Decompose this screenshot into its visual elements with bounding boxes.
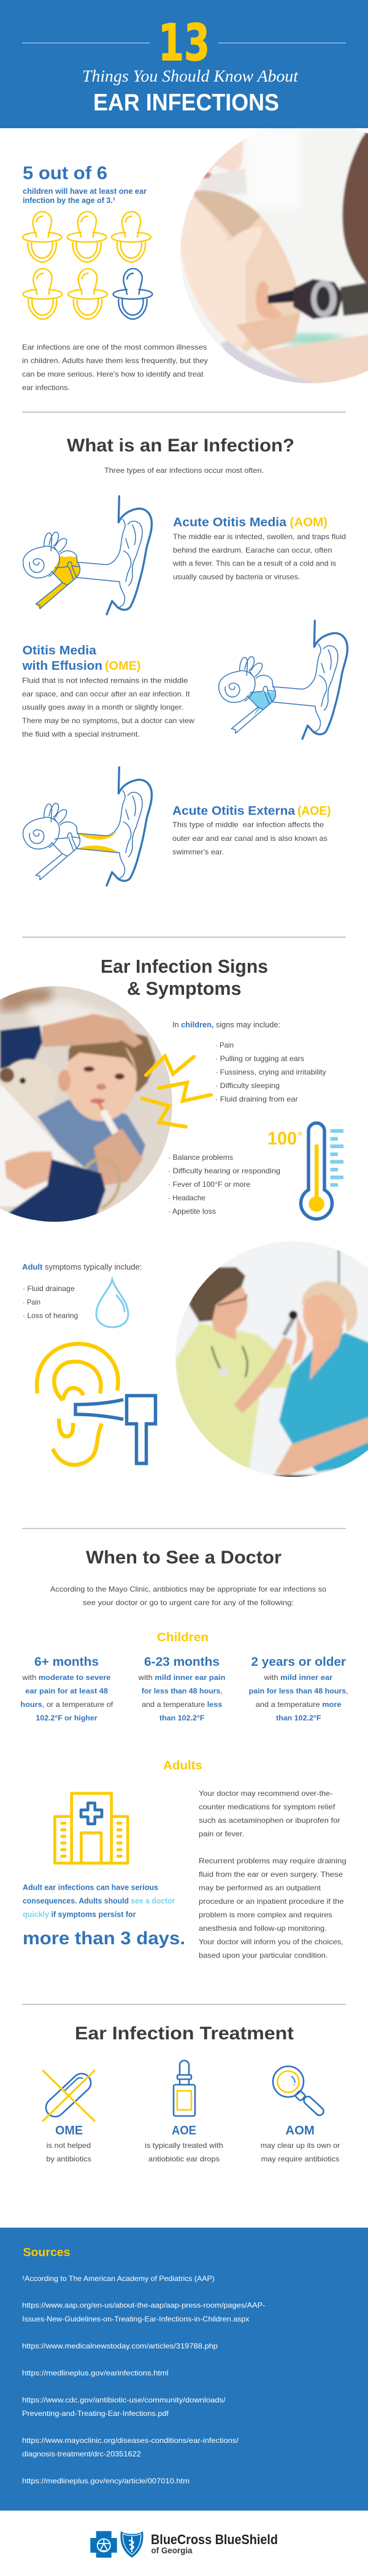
treatment: AOE: AOE (172, 2124, 196, 2137)
column: 2 years or older: pain for less than 48 hours , (249, 1687, 348, 1695)
source list: https://medlineplus.gov/ency/article/007010.htm (22, 2477, 190, 2485)
text block: AOM: usually caused by bacteria or viruses. (173, 573, 301, 581)
callout: adult warning: quickly if symptoms persist for (23, 1910, 136, 1919)
logo: BlueCross BlueShield of Georgia: of Georgia (151, 2545, 193, 2555)
icon: fluid drop (96, 1279, 128, 1327)
source list: https://www.cdc.gov/antibiotic-use/community/downloads/ (22, 2396, 226, 2404)
column: 6-23 months (138, 1655, 225, 1722)
icon: thermometer 100 degrees: ° (297, 1129, 302, 1144)
text: adult treatment options: pain or fever. (199, 1830, 244, 1838)
text: adult treatment options: problem is more complex and requires (199, 1911, 332, 1919)
treatment: AOE: is typically treated with (145, 2141, 223, 2150)
intro paragraph: can be more serious. Here's how to identify and treat (22, 370, 204, 378)
icon: thermometer 100 degrees (267, 1123, 343, 1219)
treatment: OME: is not helped (47, 2141, 91, 2150)
column: 2 years or older (249, 1655, 348, 1722)
treatment: AOM: AOM (285, 2124, 315, 2137)
list: child symptoms: · Fluid draining from ear (215, 1095, 298, 1103)
list: child symptoms: · Difficulty sleeping (215, 1081, 280, 1090)
source list: https://www.mayoclinic.org/diseases-conditions/ear-infections/ (22, 2436, 239, 2445)
text block: OME (21, 644, 194, 738)
text block: AOE: Acute Otitis Externa (172, 805, 296, 818)
panel: header banner (0, 0, 368, 128)
list: adult symptoms: · Pain (23, 1298, 40, 1306)
text block: AOM (172, 516, 346, 581)
treatment: OME: OME (55, 2124, 83, 2137)
list: child symptoms (172, 1021, 326, 1103)
text: adult treatment options: counter medications for symptom relief (199, 1803, 335, 1811)
text: doctor intro: see your doctor or go to urgent care for any of the following: (83, 1598, 294, 1607)
text block: OME: Fluid that is not infected remains in the middle (22, 676, 188, 684)
list: adult symptoms: · Loss of hearing (23, 1311, 78, 1320)
list: child symptoms: · Fussiness, crying and irritability (215, 1068, 326, 1076)
photo: baby ear exam (178, 120, 368, 393)
column: 6-23 months: than 102.2°F (159, 1714, 205, 1722)
intro paragraph: ear infections. (22, 383, 70, 392)
source list: diagnosis-treatment/drc-20351622 (22, 2450, 141, 2458)
number 13: 13 (158, 14, 210, 72)
text block: OME: usually goes away in a month or slightly longer. (22, 703, 183, 711)
stat: 5 out of 6: 5 out of 6 (23, 163, 107, 183)
source list: https://medlineplus.gov/earinfections.html (22, 2369, 169, 2377)
heading: when to see a doctor: When to See a Doctor (86, 1547, 282, 1568)
treatment: AOM: may require antibiotics (261, 2155, 339, 2163)
column: 6-23 months: with mild inner ear pain (138, 1673, 225, 1682)
column: 2 years or older: than 102.2°F (276, 1714, 321, 1722)
source list: https://www.aap.org/en-us/about-the-aap/aap-press-room/pages/AAP- (22, 2301, 265, 2310)
text block: AOM: with a fever. This can be a result of a cold and is (172, 559, 336, 568)
text: adult treatment options: fluid from the ear or even surgery. These (199, 1870, 343, 1879)
source list (22, 2274, 265, 2485)
text: adult treatment options: Your doctor will inform you of the choices, (199, 1938, 343, 1946)
intro paragraph: in children. Adults have them less frequently, but they (22, 356, 208, 365)
sources heading: Sources (23, 2246, 70, 2260)
heading: signs and symptoms: & Symptoms (127, 978, 242, 999)
icon: thermometer 100 degrees: 100 (267, 1129, 297, 1149)
text block: AOE (172, 805, 331, 856)
text block: AOM: Acute Otitis Media (173, 516, 287, 529)
photo: boy with thermometer (0, 981, 178, 1227)
heading: signs and symptoms: Ear Infection Signs (101, 956, 268, 977)
text: adult treatment options: may be performed as an outpatient (199, 1884, 321, 1892)
script subtitle: Things You Should Know About (82, 67, 299, 85)
logo: BlueCross BlueShield of Georgia (90, 2531, 278, 2558)
column: 6-23 months: and a temperature less (142, 1700, 223, 1709)
callout: adult warning: consequences. Adults should see a doctor (23, 1896, 175, 1905)
photo: doctor examines patient's ear (172, 1239, 368, 1484)
icon: ear drop bottle (174, 2061, 195, 2116)
intro paragraph (22, 343, 208, 392)
text: adult treatment options: based upon your particular condition. (199, 1951, 328, 1960)
text block: OME: There may be no symptoms, but a doctor can view (22, 716, 194, 725)
stat: 5 out of 6: children will have at least one ear (23, 186, 147, 196)
heading: treatment: Ear Infection Treatment (75, 2023, 294, 2044)
column: 2 years or older: and a temperature more (256, 1700, 342, 1709)
icon: ear and otoscope (37, 1344, 156, 1465)
text block: OME: ear space, and can occur after an ear infection. It (22, 689, 190, 698)
treatment: OME: by antibiotics (46, 2155, 91, 2163)
icons: six pacifiers (23, 212, 152, 319)
text: adult treatment options: such as acetaminophen or ibuprofen for (199, 1816, 340, 1825)
source list: https://www.medicalnewstoday.com/articles/319788.php (22, 2342, 218, 2350)
title: EAR INFECTIONS (93, 90, 279, 116)
source list: ¹According to The American Academy of Pediatrics (AAP) (22, 2274, 215, 2283)
diagram: AOE ear (23, 767, 151, 886)
list: more child symptoms: · Appetite loss (168, 1207, 216, 1216)
treatment: AOM (261, 2124, 340, 2163)
icon: magnifying glass (273, 2066, 325, 2117)
list: child symptoms: In children, signs may include: (172, 1021, 280, 1029)
text block: AOE: This type of middle ear infection affects the (172, 821, 324, 829)
text block: OME: the fluid with a special instrument. (22, 730, 140, 738)
callout: adult warning: more than 3 days. (23, 1928, 185, 1949)
list: more child symptoms: · Balance problems (168, 1153, 233, 1162)
panel: sources (0, 2228, 368, 2511)
column: 6+ months: with moderate to severe (21, 1673, 111, 1682)
text: doctor intro (50, 1585, 326, 1607)
heading: children: Children (157, 1631, 209, 1644)
list: more child symptoms: · Headache (168, 1194, 205, 1202)
text block: OME: Otitis Media (22, 644, 97, 657)
list: child symptoms: · Pulling or tugging at ears (215, 1054, 304, 1063)
treatment: OME (46, 2124, 91, 2163)
source list: Preventing-and-Treating-Ear-Infections.pdf (22, 2409, 169, 2418)
diagram: AOM ear (23, 496, 151, 615)
column: 6+ months: hours, or a temperature of (20, 1700, 113, 1709)
text block: AOM: (AOM) (289, 516, 328, 529)
text block: AOM: The middle ear is infected, swollen, and traps fluid (173, 532, 346, 541)
text: adult treatment options: Recurrent problems may require draining (199, 1857, 347, 1865)
subheading: Three types of ear infections occur most often. (104, 466, 264, 475)
diagram: OME ear (219, 621, 347, 739)
text block: AOM: behind the eardrum. Earache can occur, often (173, 546, 332, 554)
list: adult symptoms (22, 1263, 142, 1320)
column: 6+ months: ear pain for at least 48 (25, 1687, 108, 1695)
text block: OME: with Effusion (21, 659, 102, 673)
list: more child symptoms (168, 1153, 280, 1216)
intro paragraph: Ear infections are one of the most common illnesses (22, 343, 207, 351)
treatment: AOE (145, 2124, 223, 2163)
text block: AOE: (AOE) (297, 805, 331, 818)
text: adult treatment options: anesthesia and follow-up monitoring. (199, 1924, 327, 1933)
column: 6+ months: 6+ months (34, 1655, 99, 1669)
icon: crossed-out pill (42, 2070, 95, 2122)
column: 6-23 months: for less than 48 hours , (142, 1687, 223, 1695)
logo: BlueCross BlueShield of Georgia: BlueCross BlueShield (151, 2532, 278, 2547)
text: adult treatment options (199, 1789, 347, 1960)
column: 6+ months: 102.2°F or higher (36, 1714, 98, 1722)
source list: Issues-New-Guidelines-on-Treating-Ear-Infections-in-Children.aspx (22, 2315, 249, 2323)
icon: hospital (55, 1793, 128, 1863)
icon: pain lightning bolts (142, 1056, 211, 1127)
column: 2 years or older: with mild inner ear (263, 1673, 333, 1682)
column: 2 years or older: 2 years or older (251, 1655, 346, 1669)
text block: OME: (OME) (105, 659, 141, 673)
list: child symptoms: · Pain (215, 1041, 234, 1049)
heading: signs and symptoms (101, 956, 268, 999)
list: more child symptoms: · Difficulty hearing or responding (168, 1167, 280, 1175)
heading: adults: Adults (163, 1759, 202, 1773)
text: doctor intro: According to the Mayo Clinic, antibiotics may be appropriate for ear infections so (50, 1585, 326, 1593)
stat: 5 out of 6 (23, 163, 147, 205)
list: more child symptoms: · Fever of 100°F or more (168, 1180, 250, 1189)
text block: AOE: swimmer's ear. (172, 848, 224, 856)
text: adult treatment options: procedure or an inpatient procedure if the (199, 1897, 344, 1906)
stat: 5 out of 6: infection by the age of 3.¹ (23, 196, 115, 205)
callout: adult warning: Adult ear infections can have serious (23, 1883, 158, 1892)
column: 6+ months (20, 1655, 113, 1722)
text block: AOE: outer ear and ear canal and is also known as (172, 834, 328, 843)
list: adult symptoms: Adult symptoms typically include: (22, 1263, 142, 1271)
column: 6-23 months: 6-23 months (144, 1655, 220, 1669)
treatment: AOE: antiobiotic ear drops (148, 2155, 220, 2163)
list: adult symptoms: · Fluid drainage (23, 1284, 75, 1293)
callout: adult warning (23, 1883, 185, 1949)
heading: what is an ear infection: What is an Ear Infection? (67, 435, 294, 456)
text: adult treatment options: Your doctor may recommend over-the- (199, 1789, 332, 1798)
treatment: AOM: may clear up its own or (261, 2141, 340, 2150)
